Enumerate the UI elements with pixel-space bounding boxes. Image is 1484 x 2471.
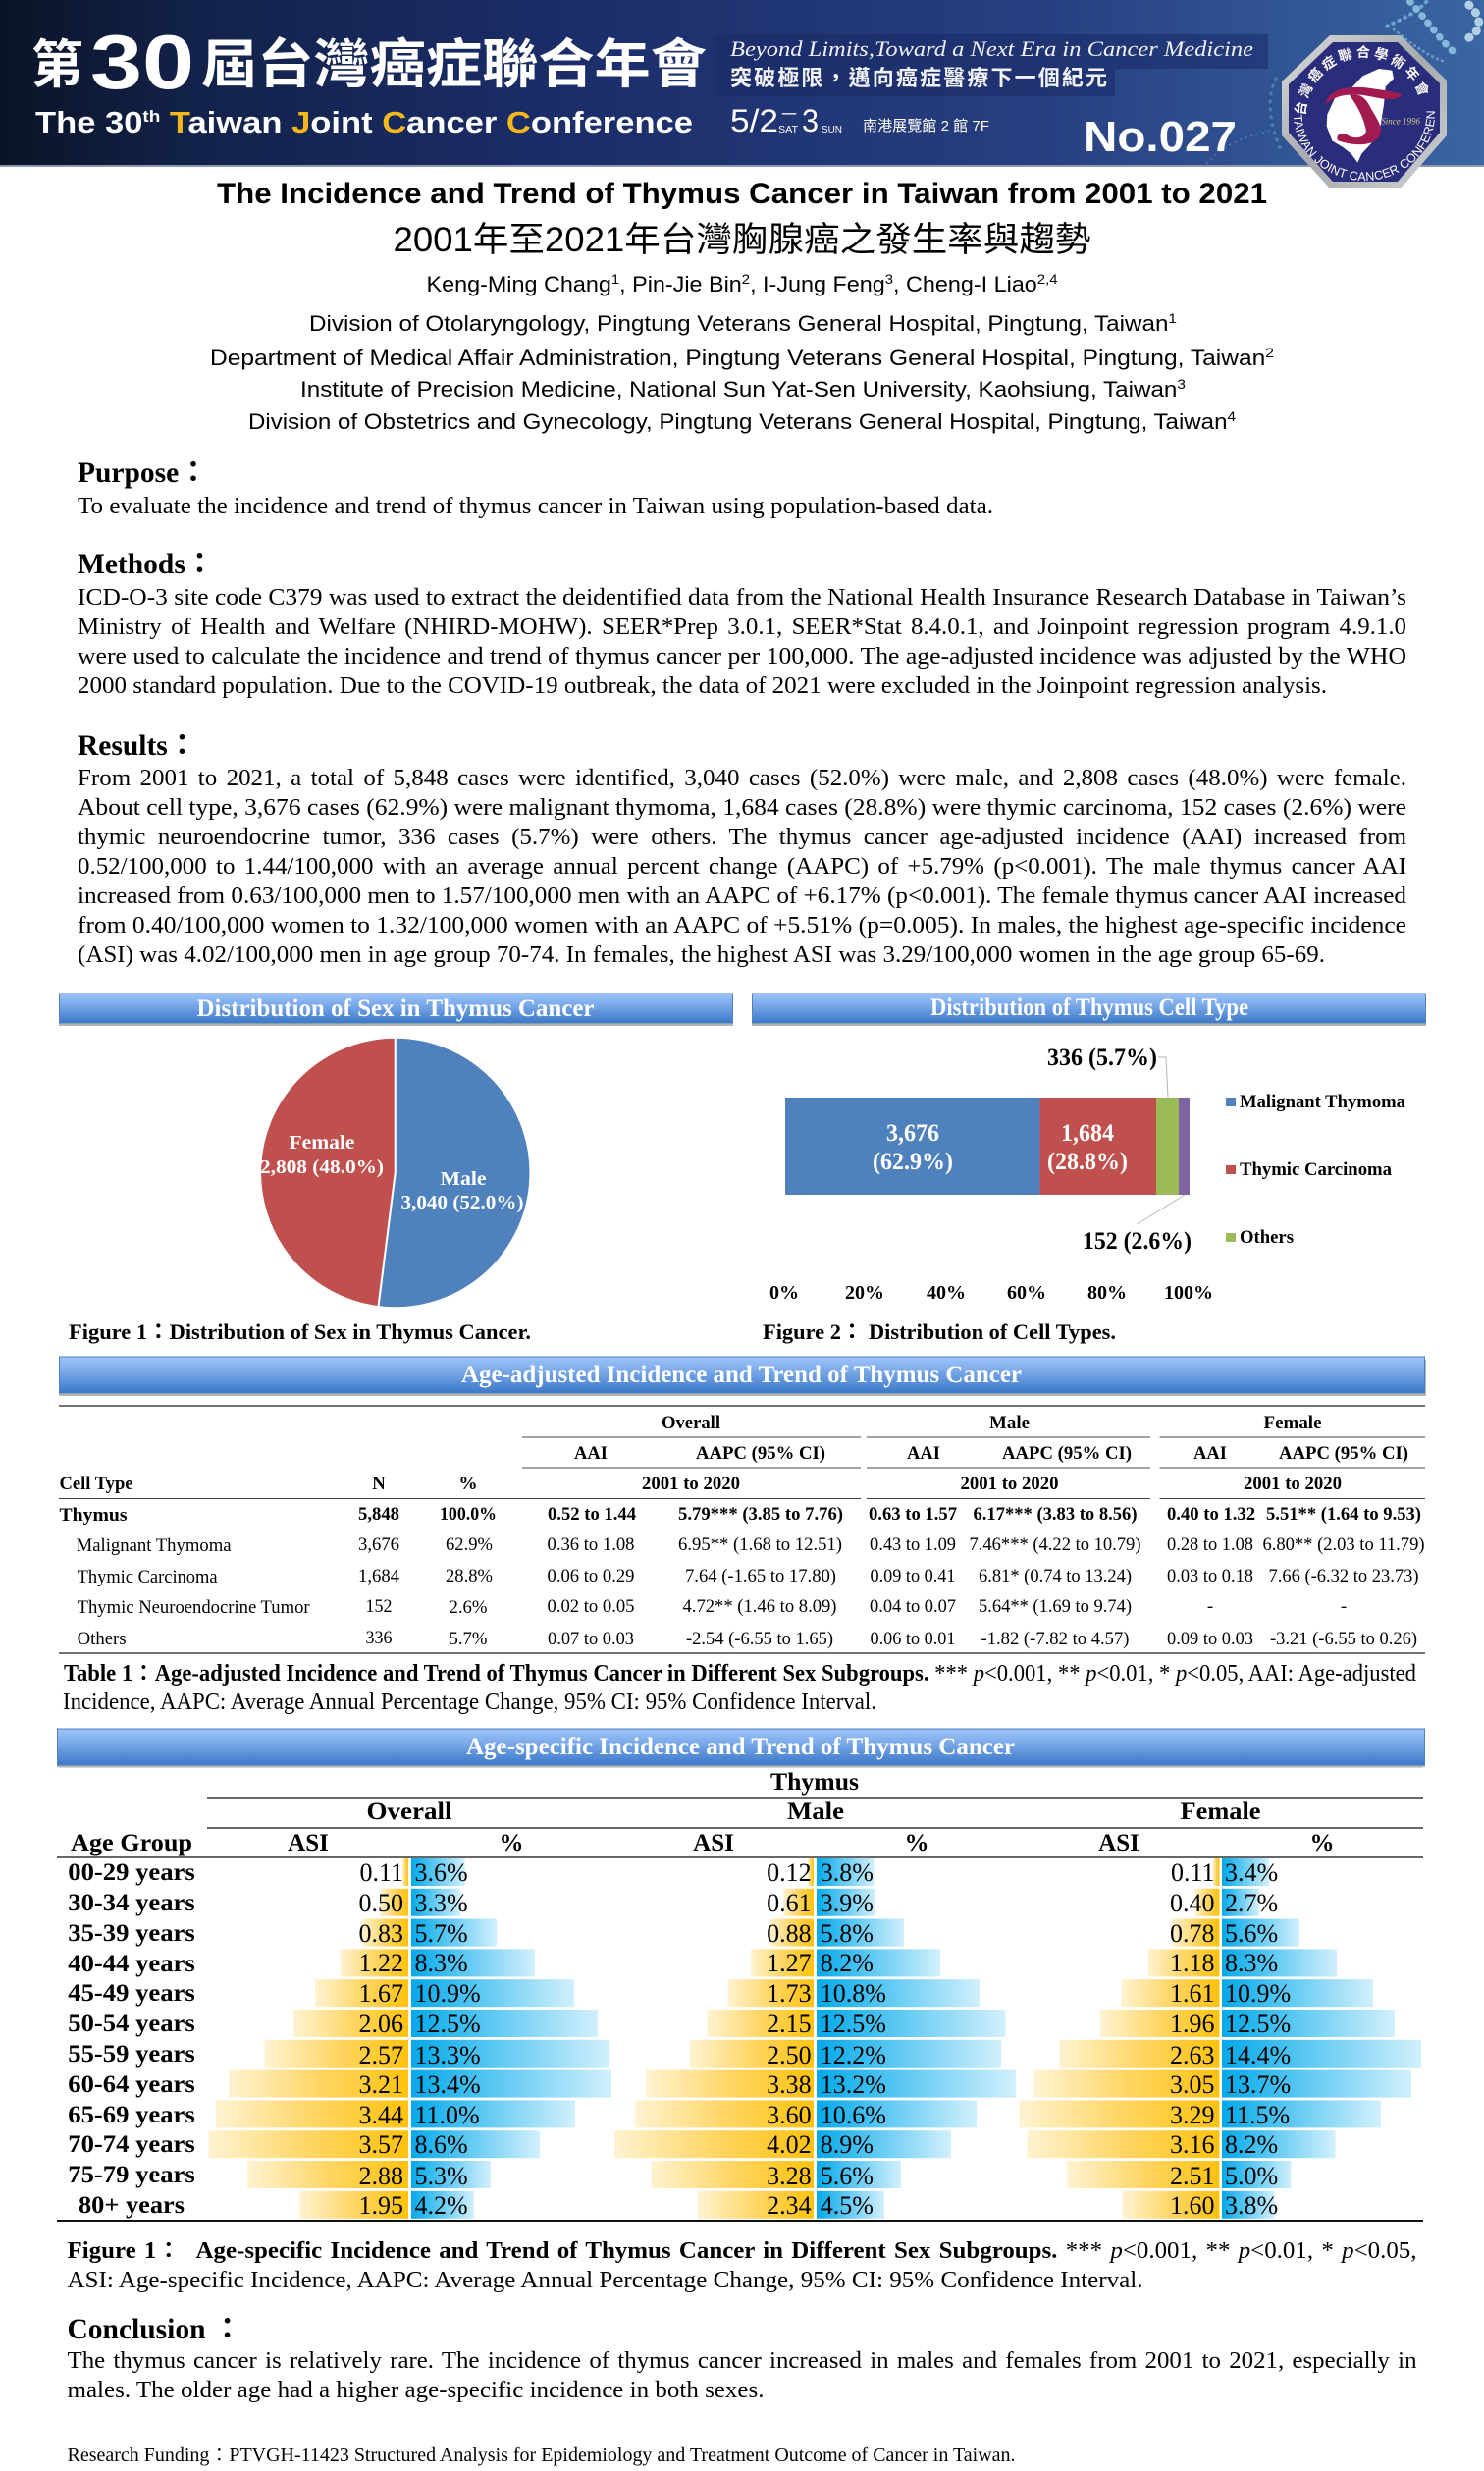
female ASI values: 1.96 <box>1170 2010 1215 2038</box>
banner title chinese: 屆台灣癌症聯合年會 <box>201 35 707 94</box>
male ASI values: 3.28 <box>767 2162 812 2190</box>
purpose section: To evaluate the incidence and trend of thymus cancer in Taiwan using population-based data. <box>78 494 993 519</box>
authors: , Cheng-I Liao <box>893 272 1037 296</box>
purpose section: Purpose： <box>78 457 208 489</box>
slogan box <box>715 34 1268 96</box>
overall percent values: 5.7% <box>414 1919 468 1948</box>
row: thymus: 0.40 to 1.32 <box>1167 1504 1255 1525</box>
callout: neuroendocrine count: 152 (2.6%) <box>1083 1228 1192 1255</box>
panel heading: age-adjusted incidence <box>59 1357 1426 1396</box>
female ASI values: 2.51 <box>1170 2162 1215 2190</box>
callout: neuroendocrine count <box>1083 1195 1192 1255</box>
female percent values: 5.0% <box>1225 2162 1278 2190</box>
female ASI values: 0.40 <box>1170 1889 1215 1917</box>
bar label: thymic carcinoma <box>1047 1120 1128 1175</box>
male percent values <box>821 1858 886 2220</box>
table header: AAI <box>907 1443 940 1464</box>
female ASI values: 0.78 <box>1170 1919 1215 1948</box>
overall percent values: 5.3% <box>414 2162 468 2190</box>
row: others: Others <box>78 1629 127 1649</box>
slogan box: 突破極限，邁向癌症醫療下一個紀元 <box>730 66 1109 90</box>
date and venue: SUN <box>822 125 842 135</box>
female percent values: 8.3% <box>1225 1949 1278 1977</box>
row: malignant thymoma: 62.9% <box>446 1534 493 1555</box>
age group labels: 60-64 years <box>68 2071 195 2098</box>
affiliation 4: 4 <box>1227 408 1236 424</box>
logo: Since 1996 <box>1381 117 1420 127</box>
authors: , Pin-Jie Bin <box>619 272 742 296</box>
axis labels <box>769 1282 1213 1304</box>
affiliation 1: 1 <box>1168 310 1177 326</box>
panel heading: distribution of cell type <box>752 994 1426 1026</box>
panel heading: age-adjusted incidence: Age-adjusted Incidence and Trend of Thymus Cancer <box>461 1362 1022 1388</box>
female ASI values: 3.29 <box>1170 2101 1215 2129</box>
male percent values: 12.2% <box>821 2041 886 2069</box>
decoration: DNA helix <box>1207 2 1479 164</box>
age-specific figure caption: ASI: Age-specific Incidence, AAPC: Average Annual Percentage Change, 95% CI: 95% Confidence Interval. <box>67 2268 1142 2293</box>
row: malignant thymoma <box>77 1534 1425 1556</box>
table: age-adjusted incidence <box>59 1406 1425 1653</box>
female ASI values: 0.11 <box>1171 1858 1215 1887</box>
overall percent values: 3.6% <box>414 1858 468 1887</box>
row: thymic carcinoma: 0.09 to 0.41 <box>870 1566 956 1586</box>
affiliation 2: 2 <box>1265 345 1274 360</box>
row: thymic carcinoma: Thymic Carcinoma <box>78 1567 218 1587</box>
table 1 caption: Table 1：Age-adjusted Incidence and Trend of Thymus Cancer in Different Sex Subgroups. *** p<0.001, ** p<0.01, * p<0.05, AAI: Age-adjusted <box>64 1661 1416 1687</box>
table header: Overall <box>367 1799 452 1825</box>
male percent values: 10.6% <box>821 2101 886 2129</box>
female percent values: 5.6% <box>1225 1919 1278 1948</box>
banner title chinese: 第 <box>31 36 83 94</box>
table header: 2001 to 2020 <box>642 1474 740 1494</box>
row: others: -1.82 (-7.82 to 4.57) <box>981 1629 1129 1649</box>
pie slice: male <box>378 1038 530 1308</box>
row: thymic carcinoma: 7.64 (-1.65 to 17.80) <box>685 1566 836 1586</box>
date and venue: 5/2 <box>730 103 778 138</box>
table header: Overall <box>662 1413 720 1433</box>
male ASI values: 0.88 <box>767 1919 812 1948</box>
table header: N <box>372 1474 386 1494</box>
banner title english: The 30 <box>35 105 132 139</box>
age group labels: 40-44 years <box>68 1951 195 1977</box>
banner title english: Taiwan Joint Cancer Conference <box>170 105 676 139</box>
table 1 caption <box>63 1661 1416 1715</box>
methods section: Ministry of Health and Welfare (NHIRD-MOHW). SEER*Prep 3.0.1, SEER*Stat 8.4.0.1, and Joinpoint regression program 4.9.1.0 <box>78 615 1406 640</box>
pie label: female <box>260 1132 384 1178</box>
overall percent values: 10.9% <box>414 1979 481 2008</box>
legend: Others <box>1240 1227 1294 1248</box>
table header: Female <box>1180 1799 1260 1825</box>
table header: AAPC (95% CI) <box>1002 1443 1132 1464</box>
axis labels: 100% <box>1164 1282 1213 1304</box>
overall ASI values: 2.57 <box>359 2041 403 2069</box>
male percent values: 5.6% <box>821 2162 874 2190</box>
row: thymus: 6.17*** (3.83 to 8.56) <box>974 1504 1137 1525</box>
figure 2 caption: Figure 2： Distribution of Cell Types. <box>763 1319 1116 1344</box>
table header: ASI <box>1098 1830 1140 1856</box>
row: thymic carcinoma: 6.81* (0.74 to 13.24) <box>979 1566 1132 1586</box>
female percent values: 8.2% <box>1225 2130 1278 2159</box>
table header <box>71 1769 1335 1856</box>
row: others <box>78 1628 1417 1649</box>
male ASI values: 2.15 <box>767 2010 812 2038</box>
male ASI values: 4.02 <box>767 2130 812 2159</box>
row: others: 336 <box>365 1628 393 1648</box>
female ASI values <box>1170 1858 1215 2220</box>
female ASI values: 3.16 <box>1170 2130 1215 2159</box>
methods section: were used to calculate the incidence and trend of thymus cancer per 100,000. The age-adjusted incidence was adjusted by the WHO <box>78 644 1406 670</box>
row: thymic carcinoma: 0.03 to 0.18 <box>1167 1566 1253 1586</box>
results section: From 2001 to 2021, a total of 5,848 cases were identified, 3,040 cases (52.0%) were male, and 2,808 cases (48.0%) were female. <box>78 766 1406 791</box>
age group labels: 45-49 years <box>68 1980 195 2007</box>
overall percent values: 3.3% <box>414 1889 468 1917</box>
row: thymic carcinoma: 1,684 <box>358 1566 399 1586</box>
row: thymic neuroendocrine tumor: - <box>1341 1596 1347 1617</box>
conclusion section: The thymus cancer is relatively rare. The incidence of thymus cancer increased in males and females from 2001 to 2021, especially in <box>67 2348 1416 2374</box>
date and venue: SAT <box>778 125 798 135</box>
axis labels: 80% <box>1087 1282 1127 1304</box>
female percent values: 11.5% <box>1225 2101 1290 2129</box>
female percent values: 3.4% <box>1225 1858 1278 1887</box>
male percent values: 8.2% <box>821 1949 874 1977</box>
row: others: -2.54 (-6.55 to 1.65) <box>686 1629 833 1649</box>
pie label: female: 2,808 (48.0%) <box>260 1156 384 1178</box>
affiliation 4: Division of Obstetrics and Gynecology, Pingtung Veterans General Hospital, Pingtung, Taiwan <box>248 409 1142 434</box>
panel heading: distribution of sex <box>59 994 733 1026</box>
bar label: malignant thymoma <box>873 1120 953 1175</box>
bar label: malignant thymoma: 3,676 <box>886 1120 939 1147</box>
row: thymus <box>59 1504 1421 1526</box>
methods section: 2000 standard population. Due to the COVID-19 outbreak, the data of 2021 were excluded in the Joinpoint regression analysis. <box>78 673 1327 699</box>
row: malignant thymoma: Malignant Thymoma <box>77 1535 232 1556</box>
overall percent values: 11.0% <box>414 2101 480 2129</box>
overall ASI values: 3.44 <box>359 2101 403 2129</box>
male ASI values: 0.12 <box>767 1858 812 1887</box>
age group labels <box>68 1859 195 2219</box>
row: thymus: 0.52 to 1.44 <box>548 1504 636 1525</box>
logo <box>1282 35 1447 188</box>
male ASI values: 1.73 <box>767 1979 812 2008</box>
pie slice: female <box>260 1038 396 1307</box>
results section: 0.52/100,000 to 1.44/100,000 with an average annual percent change (AAPC) of +5.79% (p<0.001). The male thymus cancer AAI <box>78 854 1406 880</box>
male percent values: 3.8% <box>821 1858 874 1887</box>
results section <box>78 730 1406 968</box>
row: others: 0.06 to 0.01 <box>870 1629 956 1649</box>
pie label: male: 3,040 (52.0%) <box>400 1192 524 1213</box>
female percent values: 12.5% <box>1225 2010 1291 2038</box>
row: malignant thymoma: 6.95** (1.68 to 12.51) <box>678 1534 842 1555</box>
overall percent values: 13.4% <box>414 2070 481 2099</box>
male percent values: 8.9% <box>821 2130 874 2159</box>
female percent values: 10.9% <box>1225 1979 1291 2008</box>
row: thymus: 5,848 <box>358 1504 399 1525</box>
pie label: male: Male <box>440 1168 487 1190</box>
stacked bar chart: cell type <box>769 1045 1405 1304</box>
table header: 2001 to 2020 <box>960 1474 1058 1494</box>
title block <box>210 178 1274 434</box>
male ASI values: 3.38 <box>767 2070 812 2099</box>
female ASI values: 1.61 <box>1170 1979 1215 2008</box>
table header: AAI <box>574 1443 608 1464</box>
title chinese: 2001年至2021年台灣胸腺癌之發生率與趨勢 <box>393 221 1091 259</box>
banner title english: th <box>142 107 160 126</box>
table header <box>59 1413 1408 1494</box>
age group labels: 75-79 years <box>68 2162 195 2188</box>
table: age-specific incidence <box>57 1767 1423 2221</box>
female ASI values: 3.05 <box>1170 2070 1215 2099</box>
row: others: 5.7% <box>450 1629 488 1649</box>
table header: ASI <box>288 1830 329 1856</box>
row: malignant thymoma: 0.36 to 1.08 <box>548 1534 634 1555</box>
male percent values: 4.5% <box>821 2191 874 2220</box>
table header: Female <box>1264 1413 1321 1433</box>
legend <box>1226 1092 1405 1248</box>
axis labels: 40% <box>927 1282 966 1304</box>
age group labels: 70-74 years <box>68 2131 195 2158</box>
table header: Thymus <box>770 1769 859 1796</box>
methods section <box>78 549 1406 699</box>
row: thymic neuroendocrine tumor: 2.6% <box>450 1597 488 1618</box>
results section: increased from 0.63/100,000 men to 1.57/100,000 men with an AAPC of +6.17% (p<0.001). The female thymus cancer AAI increased <box>78 884 1406 909</box>
date and venue: 3 <box>802 103 819 138</box>
table rules <box>57 1767 1423 2221</box>
row: thymus: Thymus <box>59 1505 128 1526</box>
table header: ASI <box>693 1830 734 1856</box>
bar label: thymic carcinoma: (28.8%) <box>1047 1149 1128 1175</box>
male percent values: 12.5% <box>821 2010 886 2038</box>
pie label: male <box>400 1168 524 1213</box>
date and venue: 南港展覽館 2 館 7F <box>863 118 989 134</box>
row: thymic neuroendocrine tumor: 0.04 to 0.07 <box>870 1596 956 1617</box>
table header: 2001 to 2020 <box>1244 1474 1342 1494</box>
female ASI values: 2.63 <box>1170 2041 1215 2069</box>
date and venue: 一 <box>781 107 797 124</box>
legend: Thymic Carcinoma <box>1240 1159 1392 1180</box>
results section: (ASI) was 4.02/100,000 men in age group 70-74. In females, the highest ASI was 3.29/100,000 women in the age group 65-69. <box>78 942 1325 968</box>
table 1 caption: Incidence, AAPC: Average Annual Percentage Change, 95% CI: 95% Confidence Interval. <box>63 1690 876 1715</box>
row: malignant thymoma: 6.80** (2.03 to 11.79) <box>1262 1534 1425 1555</box>
row: others: 0.09 to 0.03 <box>1167 1629 1253 1649</box>
row: thymic carcinoma <box>78 1566 1419 1587</box>
row: malignant thymoma: 0.28 to 1.08 <box>1167 1534 1253 1555</box>
male ASI values: 2.34 <box>767 2191 812 2220</box>
male ASI values: 1.27 <box>767 1949 812 1977</box>
age-specific figure caption <box>67 2238 1417 2293</box>
female percent values <box>1225 1858 1291 2220</box>
table header: Male <box>989 1413 1030 1433</box>
overall ASI values: 3.57 <box>359 2130 403 2159</box>
row: thymus: 0.63 to 1.57 <box>869 1504 957 1525</box>
axis labels: 20% <box>845 1282 884 1304</box>
purpose section <box>78 457 993 519</box>
overall percent values: 8.6% <box>414 2130 468 2159</box>
row: malignant thymoma: 3,676 <box>358 1534 399 1555</box>
authors: , I-Jung Feng <box>750 272 885 296</box>
row: thymic neuroendocrine tumor: - <box>1207 1596 1213 1617</box>
male percent values: 5.8% <box>821 1919 874 1948</box>
row: thymic carcinoma: 0.06 to 0.29 <box>548 1566 634 1586</box>
overall ASI values: 3.21 <box>359 2070 403 2099</box>
methods section: Methods： <box>78 549 214 580</box>
table header: % <box>459 1474 477 1494</box>
female ASI values: 1.18 <box>1170 1949 1215 1977</box>
age group labels: 35-39 years <box>68 1920 195 1947</box>
male ASI values: 3.60 <box>767 2101 812 2129</box>
row: thymic neuroendocrine tumor: 5.64** (1.69 to 9.74) <box>979 1596 1132 1617</box>
data bars: ASI (orange) <box>208 1858 1219 2219</box>
affiliation 3: 3 <box>1177 376 1186 392</box>
affiliation 1: Division of Otolaryngology, Pingtung Veterans General Hospital, Pingtung, Taiwan <box>309 311 1089 336</box>
panel heading: distribution of cell type: Distribution of Thymus Cell Type <box>930 994 1248 1021</box>
table header: % <box>1309 1830 1335 1856</box>
authors: 3 <box>885 271 893 287</box>
overall ASI values: 2.06 <box>359 2010 403 2038</box>
female percent values: 3.8% <box>1225 2191 1278 2220</box>
research funding: Research Funding：PTVGH-11423 Structured Analysis for Epidemiology and Treatment Outcome of Cancer in Taiwan. <box>67 2444 1015 2466</box>
pie label: female: Female <box>289 1132 355 1154</box>
panel heading: age-specific incidence: Age-specific Incidence and Trend of Thymus Cancer <box>466 1734 1015 1760</box>
callout: others count: 336 (5.7%) <box>1047 1045 1157 1071</box>
row: thymic neuroendocrine tumor <box>78 1596 1347 1618</box>
age group labels: 65-69 years <box>68 2102 195 2128</box>
authors: 2,4 <box>1037 271 1058 287</box>
results section: from 0.40/100,000 women to 1.32/100,000 women with an AAPC of +5.51% (p=0.005). In males, the highest age-specific incidence <box>78 913 1406 939</box>
bar label: thymic carcinoma: 1,684 <box>1061 1120 1114 1147</box>
header banner <box>0 0 1484 167</box>
authors: Keng-Ming Chang <box>426 272 601 296</box>
overall ASI values: 0.83 <box>359 1919 403 1948</box>
row: malignant thymoma: 0.43 to 1.09 <box>870 1534 956 1555</box>
table rules <box>59 1406 1425 1653</box>
bar label: malignant thymoma: (62.9%) <box>873 1149 953 1175</box>
male percent values: 10.8% <box>821 1979 886 2008</box>
conclusion section <box>67 2314 1416 2403</box>
title english: The Incidence and Trend of Thymus Cancer in Taiwan from 2001 to 2021 <box>217 178 1267 210</box>
table header: % <box>499 1830 524 1856</box>
authors: 1 <box>611 271 619 287</box>
affiliation 2: Department of Medical Affair Administration, Pingtung Veterans General Hospital, Pingtung, Taiwan <box>210 346 1155 370</box>
overall ASI values: 1.22 <box>359 1949 403 1977</box>
age-specific figure caption: Figure 1： Age-specific Incidence and Trend of Thymus Cancer in Different Sex Subgroups. *** p<0.001, ** p<0.01, * p<0.05, <box>67 2238 1417 2264</box>
slogan box: Beyond Limits,Toward a Next Era in Cancer Medicine <box>730 36 1253 61</box>
row: thymic neuroendocrine tumor: 152 <box>365 1596 393 1617</box>
row: thymus: 100.0% <box>440 1504 497 1525</box>
female percent values: 2.7% <box>1225 1889 1278 1917</box>
conclusion section: Conclusion ： <box>67 2314 241 2345</box>
row: thymic neuroendocrine tumor: Thymic Neuroendocrine Tumor <box>78 1597 310 1618</box>
overall ASI values: 1.95 <box>359 2191 403 2220</box>
axis labels: 60% <box>1007 1282 1046 1304</box>
row: thymic neuroendocrine tumor: 4.72** (1.46 to 8.09) <box>683 1596 836 1617</box>
authors: 2 <box>742 271 750 287</box>
legend: Malignant Thymoma <box>1240 1092 1405 1112</box>
age group labels: 80+ years <box>79 2192 185 2219</box>
date and venue <box>730 103 989 138</box>
male ASI values <box>767 1858 812 2220</box>
poster number: No.027 <box>1084 113 1237 161</box>
callout: others count <box>1047 1045 1168 1098</box>
data bars: percent (blue) <box>411 1858 1421 2219</box>
overall percent values <box>414 1858 481 2220</box>
results section: Results： <box>78 730 196 762</box>
row: thymus: 5.79*** (3.85 to 7.76) <box>678 1504 843 1525</box>
overall ASI values: 0.50 <box>359 1889 403 1917</box>
figure 1 caption: Figure 1：Distribution of Sex in Thymus Cancer. <box>69 1319 531 1344</box>
male ASI values: 0.61 <box>767 1889 812 1917</box>
table header: Male <box>787 1799 844 1825</box>
overall percent values: 8.3% <box>414 1949 468 1977</box>
overall ASI values <box>359 1858 403 2220</box>
row: others: 0.07 to 0.03 <box>548 1629 634 1649</box>
row: others: -3.21 (-6.55 to 0.26) <box>1270 1629 1417 1649</box>
banner title chinese <box>31 19 707 105</box>
methods section: ICD-O-3 site code C379 was used to extract the deidentified data from the National Health Insurance Research Database in Taiwan’s <box>78 585 1406 611</box>
logo: 台灣癌症聯合學術年會 <box>1294 45 1429 114</box>
table header: Cell Type <box>59 1474 133 1494</box>
results section: About cell type, 3,676 cases (62.9%) were malignant thymoma, 1,684 cases (28.8%) were thymic carcinoma, 152 cases (2.6%) were <box>78 795 1406 821</box>
panel heading: distribution of sex: Distribution of Sex in Thymus Cancer <box>196 995 595 1022</box>
table header: Age Group <box>71 1830 192 1856</box>
overall ASI values: 1.67 <box>359 1979 403 2008</box>
overall percent values: 12.5% <box>414 2010 481 2038</box>
female percent values: 13.7% <box>1225 2070 1291 2099</box>
table header: AAPC (95% CI) <box>696 1443 825 1464</box>
age group labels: 50-54 years <box>68 2011 195 2037</box>
overall ASI values: 0.11 <box>359 1858 403 1887</box>
axis labels: 0% <box>769 1282 799 1304</box>
pie chart: sex distribution <box>260 1038 530 1308</box>
row: thymus: 5.51** (1.64 to 9.53) <box>1266 1504 1421 1525</box>
male ASI values: 2.50 <box>767 2041 812 2069</box>
table header: % <box>905 1830 928 1856</box>
overall ASI values: 2.88 <box>359 2162 403 2190</box>
age group labels: 55-59 years <box>68 2041 195 2068</box>
male percent values: 13.2% <box>821 2070 886 2099</box>
age group labels: 00-29 years <box>68 1859 195 1886</box>
row: malignant thymoma: 7.46*** (4.22 to 10.79) <box>970 1534 1140 1555</box>
banner title chinese: 30 <box>90 19 194 105</box>
age group labels: 30-34 years <box>68 1890 195 1916</box>
male percent values: 3.9% <box>821 1889 874 1917</box>
overall percent values: 13.3% <box>414 2041 481 2069</box>
conclusion section: males. The older age had a higher age-specific incidence in both sexes. <box>67 2378 764 2403</box>
table header: AAI <box>1193 1443 1227 1464</box>
row: thymic carcinoma: 7.66 (-6.32 to 23.73) <box>1268 1566 1419 1586</box>
affiliation 3: Institute of Precision Medicine, National Sun Yat-Sen University, Kaohsiung, Taiwan <box>300 377 1097 402</box>
table header: AAPC (95% CI) <box>1279 1443 1408 1464</box>
row: thymic neuroendocrine tumor: 0.02 to 0.05 <box>548 1596 634 1617</box>
panel heading: age-specific incidence <box>57 1729 1425 1767</box>
overall percent values: 4.2% <box>414 2191 468 2220</box>
row: thymic carcinoma: 28.8% <box>446 1566 493 1586</box>
female percent values: 14.4% <box>1225 2041 1291 2069</box>
results section: thymic neuroendocrine tumor, 336 cases (5.7%) were others. The thymus cancer age-adjusted incidence (AAI) increased from <box>78 825 1406 850</box>
female ASI values: 1.60 <box>1170 2191 1215 2220</box>
